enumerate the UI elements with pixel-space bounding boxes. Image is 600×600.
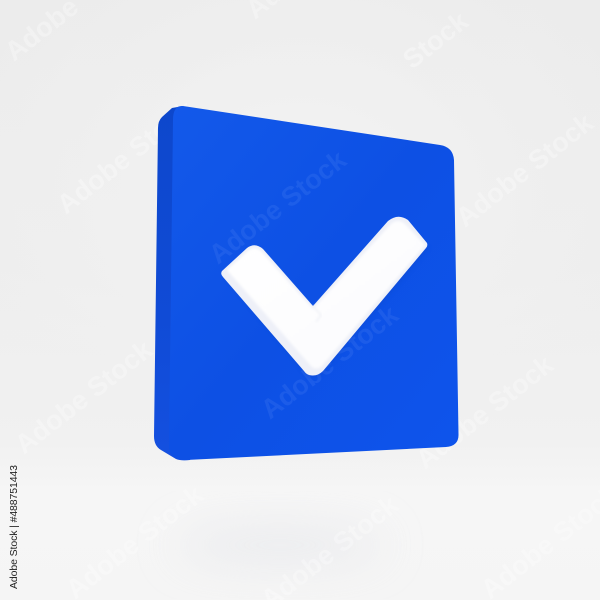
watermarks on tile: Adobe Stock — [203, 144, 353, 270]
watermarks: Adobe Stock: Adobe Stock — [450, 107, 600, 233]
check body — [221, 217, 427, 376]
check top face — [227, 221, 425, 368]
watermarks: Adobe Stock: Stock — [397, 5, 474, 75]
watermarks on tile — [203, 144, 405, 425]
credit: Adobe Stock number: Adobe Stock | #488751443 — [8, 465, 20, 589]
watermarks: Adobe Stock: Adobe Stock — [51, 94, 201, 220]
floor shadow — [175, 527, 385, 563]
tile side edge — [154, 106, 200, 460]
tile front face — [169, 106, 459, 460]
check notch crease — [313, 306, 321, 322]
check shadow — [226, 232, 429, 377]
watermarks on tile: Adobe Stock — [255, 299, 405, 425]
watermarks: Adobe Stock: Adobe Stock — [9, 334, 159, 460]
watermarks: Adobe Stock: Adobe Stock — [410, 349, 560, 475]
check mark — [221, 217, 429, 377]
tile: blue rounded square — [154, 106, 459, 460]
